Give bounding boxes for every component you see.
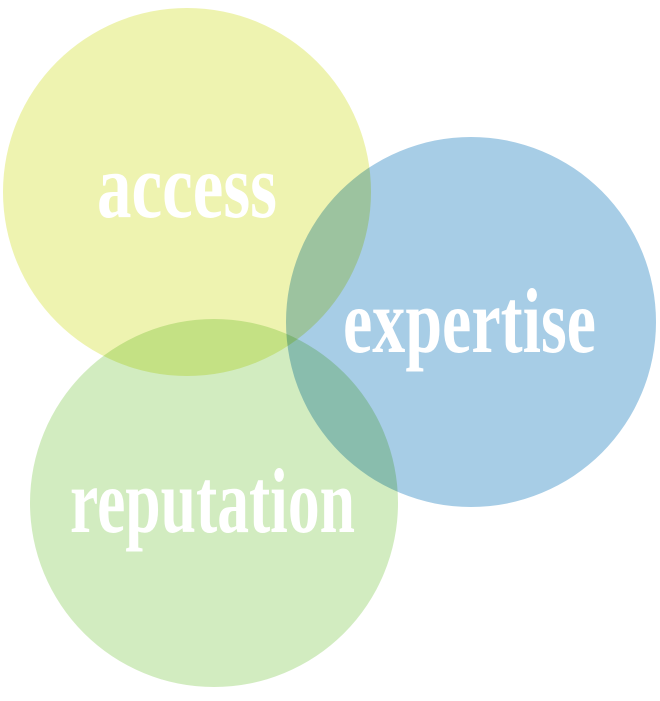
label: access: access (97, 135, 277, 237)
circle: expertise (286, 137, 656, 507)
circle: reputation (30, 319, 398, 687)
circle: access (3, 8, 371, 376)
label: reputation: reputation (70, 450, 355, 552)
